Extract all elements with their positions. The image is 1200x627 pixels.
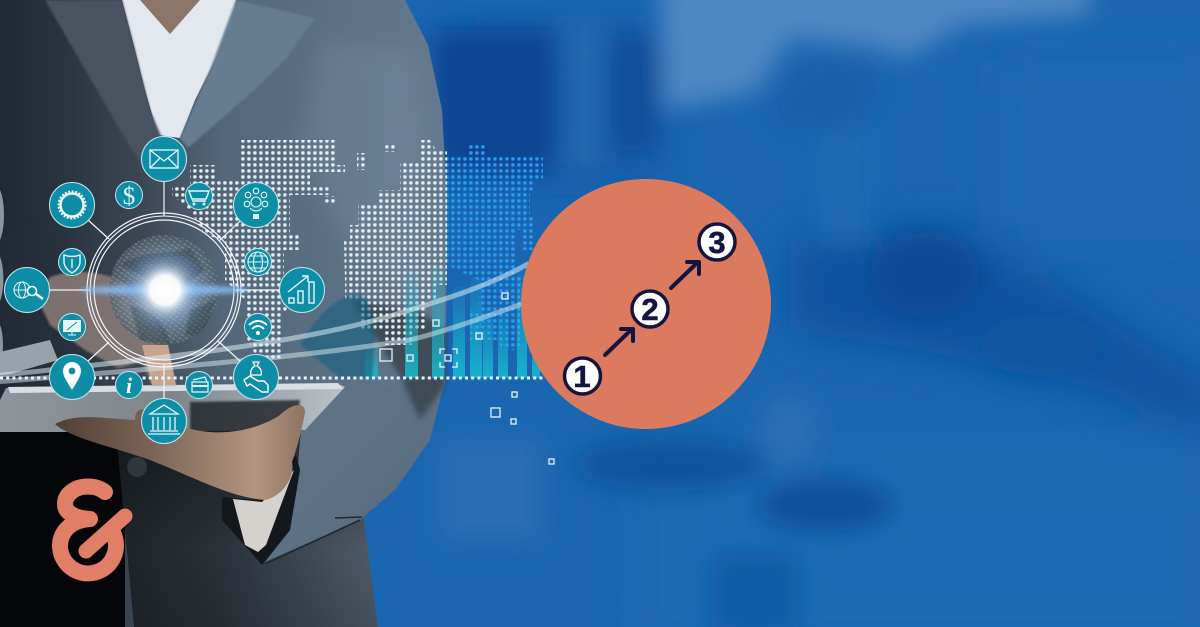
icon: globe small: [244, 248, 272, 276]
jacket shadow fold: [352, 300, 447, 420]
neck skin: [140, 0, 205, 34]
icon: map pin: [50, 354, 94, 400]
white dotted world map on suit: [172, 140, 447, 359]
icon: dollar: $: [123, 183, 135, 210]
swoosh trend lines: [0, 264, 528, 382]
icon: gear ring: [50, 182, 94, 228]
light flare: [80, 285, 250, 295]
icon: monitor: [58, 314, 86, 340]
arrow 2 to 3: [671, 262, 699, 288]
connectors: [49, 181, 280, 399]
icon: wifi: [244, 314, 272, 340]
icon: cart: [186, 182, 212, 210]
lower jacket: [116, 430, 378, 627]
icon: shield: [58, 248, 86, 276]
badge 1: [564, 358, 600, 394]
shirt cuff left: [0, 340, 58, 375]
pointing hand: [38, 272, 176, 385]
jacket upper body: [0, 0, 447, 627]
dotted baseline: [0, 376, 545, 380]
badge 3: [699, 224, 735, 260]
fingertip: [142, 345, 176, 385]
icon: globe search: [4, 268, 50, 312]
sleeve: [265, 380, 445, 562]
icon: info: [116, 372, 142, 398]
hand under tablet: [55, 405, 305, 500]
icon: hand with money bag: [234, 354, 278, 400]
icon: light bulb with gears: [234, 182, 278, 228]
shirt: [122, 0, 236, 138]
small floating squares: [380, 293, 554, 464]
steps circle: [521, 179, 771, 429]
orange disc: [521, 179, 771, 429]
dark blue teal jacket swoosh: [300, 294, 374, 378]
arrow 1 to 2: [605, 329, 633, 355]
globe: [109, 235, 219, 345]
icon: envelope: [142, 136, 186, 182]
badge 2: 2: [641, 292, 659, 327]
icon: bank: [142, 398, 186, 444]
left lapel: [45, 0, 162, 178]
lower jacket left dark panel: [0, 425, 125, 627]
blue dotted world map: [447, 145, 543, 350]
badge 3: 3: [708, 225, 726, 260]
badge 2: [632, 291, 668, 327]
icon: credit card: [186, 372, 212, 398]
businessman: [0, 0, 447, 627]
right lapel: [180, 0, 315, 148]
jacket highlight: [300, 40, 430, 300]
icon: growth chart: [280, 268, 324, 312]
sleeve slit: [265, 517, 362, 564]
rings: [87, 213, 241, 367]
teal bar chart: [365, 266, 540, 378]
badge 1: 1: [573, 359, 591, 394]
button: [127, 457, 147, 477]
ampersand logo: [60, 486, 125, 573]
icon: dollar: [116, 182, 142, 210]
icon: info: i: [126, 373, 133, 398]
hub rings and globe: [49, 181, 280, 399]
grey discs at edge: [0, 190, 4, 365]
tablet: [0, 384, 345, 432]
shirt cuff and inner sleeve: [222, 455, 300, 565]
left arm in shadow: [0, 230, 110, 385]
